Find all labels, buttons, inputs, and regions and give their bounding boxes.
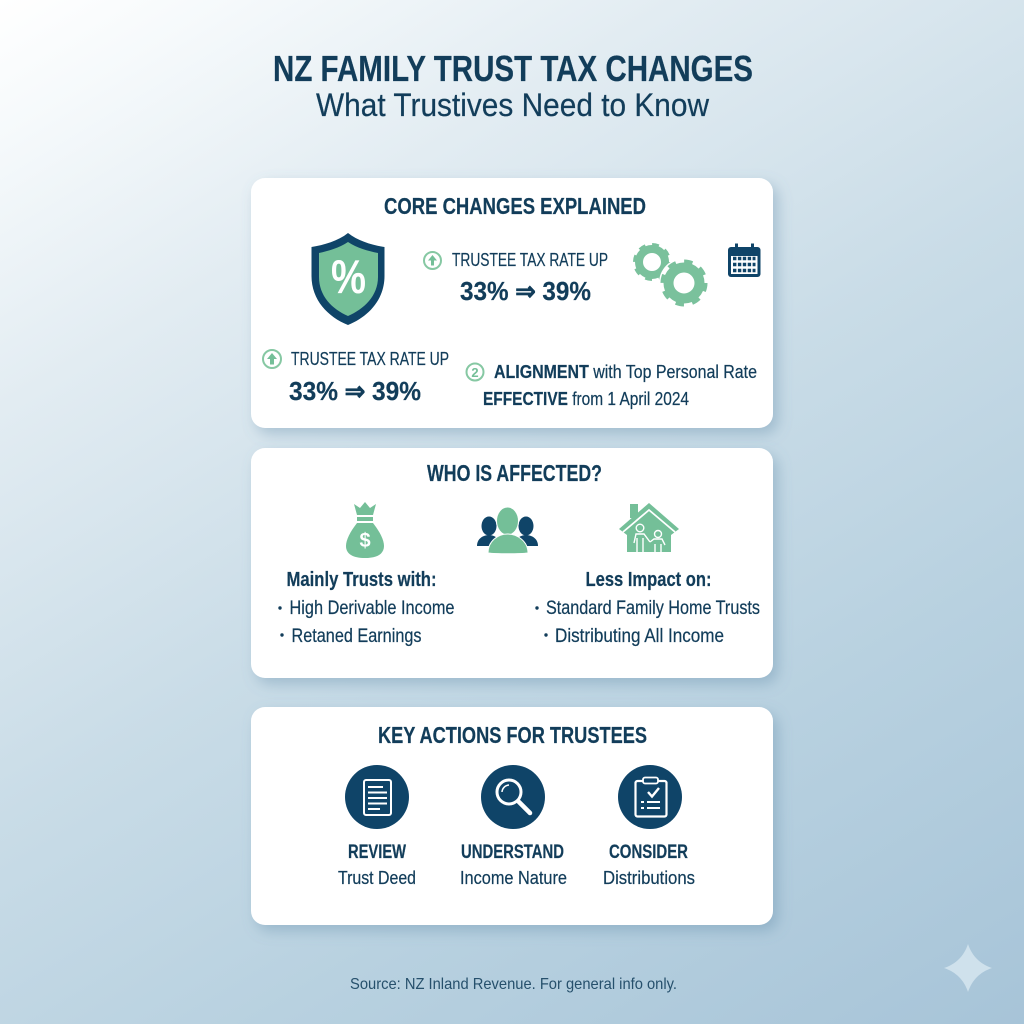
text: rate change: 33% ⇒ 39% bbox=[460, 276, 591, 306]
text block: mainly trusts with: Mainly Trusts with: bbox=[286, 569, 436, 591]
icon: document bbox=[345, 765, 409, 829]
text: consider distributions bbox=[603, 842, 695, 888]
icon: money bag bbox=[346, 502, 384, 558]
icon: clipboard checklist bbox=[618, 765, 682, 829]
text: understand income nature bbox=[460, 842, 567, 888]
icon: money bag: $ bbox=[359, 530, 371, 552]
title: NZ FAMILY TRUST TAX CHANGES bbox=[273, 48, 753, 89]
heading: core changes: CORE CHANGES EXPLAINED bbox=[384, 193, 646, 219]
panel: core changes explained bbox=[251, 178, 773, 428]
text: alignment: ALIGNMENT with Top Personal Rate bbox=[494, 362, 757, 382]
text: consider distributions: Distributions bbox=[603, 867, 695, 888]
heading: key actions: KEY ACTIONS FOR TRUSTEES bbox=[378, 722, 647, 748]
panel: key actions for trustees bbox=[251, 707, 773, 925]
text: review trust deed bbox=[338, 842, 416, 888]
icon: number two badge bbox=[466, 364, 484, 380]
icon: sparkle bbox=[944, 944, 992, 992]
heading: who is affected: WHO IS AFFECTED? bbox=[427, 460, 602, 486]
title: What Trustives Need to Know bbox=[316, 87, 710, 123]
text: effective date: EFFECTIVE from 1 April 2024 bbox=[483, 389, 689, 409]
text: review trust deed: Trust Deed bbox=[338, 867, 416, 888]
title bbox=[273, 48, 753, 123]
icon: percent shield: % bbox=[331, 250, 366, 303]
text block: less impact on: Less Impact on: bbox=[586, 569, 712, 591]
icon: calendar bbox=[728, 244, 760, 277]
icon: people group bbox=[477, 507, 538, 554]
text block: mainly trusts with: Retaned Earnings bbox=[292, 626, 422, 647]
icon: percent shield bbox=[312, 233, 384, 325]
text: review trust deed: REVIEW bbox=[348, 842, 406, 863]
panel: who is affected bbox=[251, 448, 773, 678]
icon: up arrow badge bbox=[424, 252, 441, 269]
text: understand income nature: Income Nature bbox=[460, 867, 567, 888]
icon: magnifying glass bbox=[481, 765, 545, 829]
text block: less impact on: Distributing All Income bbox=[555, 626, 724, 647]
text: trustee tax rate up 2: TRUSTEE TAX RATE UP bbox=[291, 349, 449, 369]
icon: number two badge: 2 bbox=[471, 365, 479, 380]
text: rate change 2: 33% ⇒ 39% bbox=[289, 376, 421, 406]
icon: gears bbox=[635, 245, 709, 308]
text block: mainly trusts with bbox=[278, 569, 454, 647]
text: consider distributions: CONSIDER bbox=[609, 842, 688, 863]
text block: mainly trusts with: High Derivable Income bbox=[290, 598, 454, 619]
icon: up arrow badge 2 bbox=[263, 350, 281, 368]
source note: Source: NZ Inland Revenue. For general info only. bbox=[350, 976, 677, 993]
icon: family home bbox=[619, 503, 679, 552]
text: trustee tax rate up: TRUSTEE TAX RATE UP bbox=[452, 250, 608, 270]
text block: less impact on: Standard Family Home Trusts bbox=[546, 598, 760, 619]
text: understand income nature: UNDERSTAND bbox=[461, 842, 564, 863]
text block: less impact on bbox=[535, 569, 760, 647]
